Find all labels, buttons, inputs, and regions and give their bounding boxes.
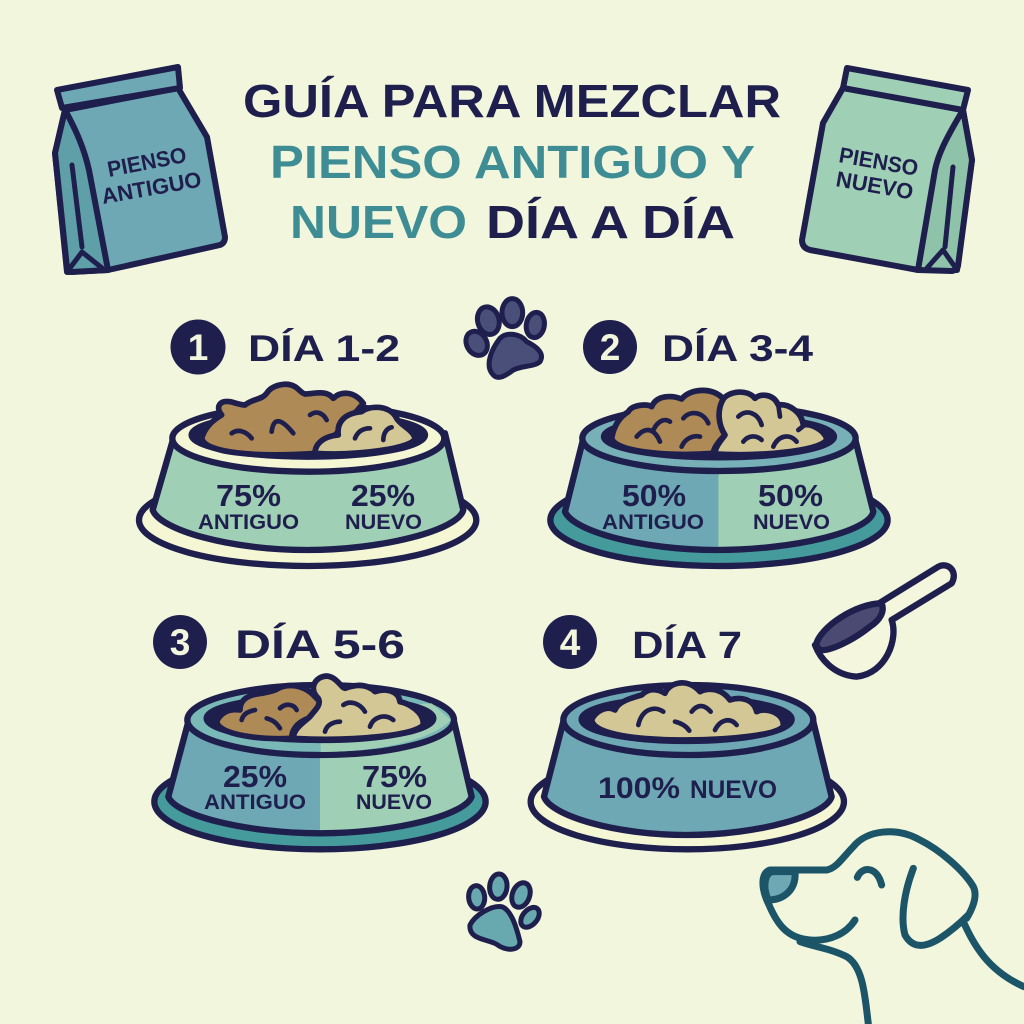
title: PIENSO ANTIGUO Y	[270, 136, 755, 188]
bowl 1: 75/25: 25%	[351, 478, 415, 513]
step 2 heading: 2	[600, 327, 620, 368]
bowl 2: 50/50: ANTIGUO	[602, 511, 704, 534]
title: NUEVO	[290, 196, 467, 248]
bowl 3: 25/75: NUEVO	[356, 791, 432, 814]
bowl 2: 50/50: 50%	[622, 478, 686, 513]
icon: new food bag	[802, 68, 972, 271]
step 3 heading: 3	[170, 622, 190, 663]
icon: paw bottom	[468, 873, 543, 949]
bowl 4: 100%: 100%	[598, 772, 680, 805]
bowl 3: 25/75: 25%	[223, 759, 287, 794]
bowl 1: 75/25: NUEVO	[345, 511, 422, 534]
bowl 4: 100%	[531, 683, 844, 849]
step 2 heading	[583, 320, 813, 374]
bowl 3: 25/75	[154, 676, 486, 849]
step 4 heading: DÍA 7	[632, 623, 742, 667]
step 3 heading: DÍA 5-6	[235, 622, 405, 667]
step 4 heading	[543, 615, 742, 669]
bowl 3: 25/75: ANTIGUO	[204, 791, 306, 814]
icon: new food bag: PIENSO	[837, 142, 920, 181]
bowl 1: 75/25: ANTIGUO	[198, 511, 299, 534]
illustration: dog	[763, 832, 1024, 1024]
title: GUÍA PARA MEZCLAR	[243, 75, 781, 127]
bowl 3: 25/75: 75%	[362, 759, 427, 794]
step 3 heading	[153, 615, 405, 669]
step 1 heading: 1	[188, 327, 208, 368]
icon: old food bag: ANTIGUO	[100, 167, 203, 209]
icon: old food bag: PIENSO	[105, 142, 188, 182]
step 4 heading: 4	[560, 622, 581, 663]
bowl 4: 100%: NUEVO	[690, 776, 777, 804]
icon: old food bag	[55, 67, 225, 272]
title	[243, 75, 781, 248]
step 1 heading: DÍA 1-2	[248, 328, 400, 369]
icon: paw top	[462, 299, 546, 377]
bowl 1: 75/25	[139, 384, 476, 566]
bowl 2: 50/50	[550, 390, 888, 566]
bowl 1: 75/25: 75%	[216, 478, 281, 513]
step 1 heading	[170, 320, 400, 374]
step 2 heading: DÍA 3-4	[662, 328, 813, 369]
icon: new food bag: NUEVO	[834, 166, 915, 204]
icon: measuring scoop	[815, 565, 954, 677]
bowl 2: 50/50: 50%	[758, 478, 823, 513]
bowl 2: 50/50: NUEVO	[753, 511, 830, 534]
title: DÍA A DÍA	[486, 196, 735, 248]
